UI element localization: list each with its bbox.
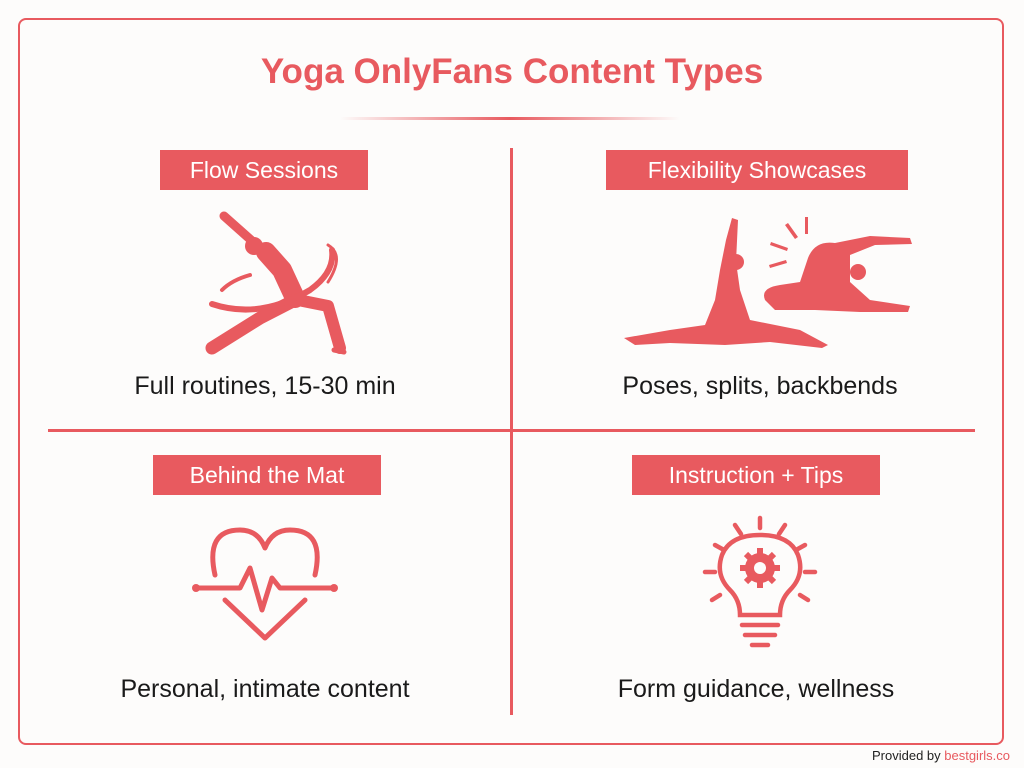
label: Flexibility Showcases: Flexibility Showcases — [648, 157, 866, 183]
icon: lightbulb with gear — [702, 516, 818, 648]
footer credit: Provided by bestgirls.co — [872, 748, 1010, 763]
caption: Poses, splits, backbends — [622, 372, 898, 400]
icon: split and backbend — [624, 217, 912, 348]
caption: Full routines, 15-30 min — [134, 372, 396, 400]
label: Flexibility Showcases — [606, 150, 908, 190]
label: Behind the Mat — [153, 455, 381, 495]
caption: Form guidance, wellness — [618, 675, 894, 703]
caption: Personal, intimate content — [120, 675, 410, 703]
panel: flexibility showcases — [606, 150, 912, 400]
label: Behind the Mat: Behind the Mat — [190, 462, 344, 488]
panel: flow sessions — [134, 150, 396, 400]
panel: instruction + tips — [618, 455, 894, 703]
panel: behind the mat — [120, 455, 410, 703]
icon: heart with pulse — [192, 528, 338, 640]
label: Flow Sessions: Flow Sessions — [190, 157, 338, 183]
label: Instruction + Tips: Instruction + Tips — [669, 462, 843, 488]
label: Instruction + Tips — [632, 455, 880, 495]
title: Yoga OnlyFans Content Types — [261, 52, 763, 91]
label: Flow Sessions — [160, 150, 368, 190]
icon: yoga pose with swirl — [206, 212, 346, 354]
